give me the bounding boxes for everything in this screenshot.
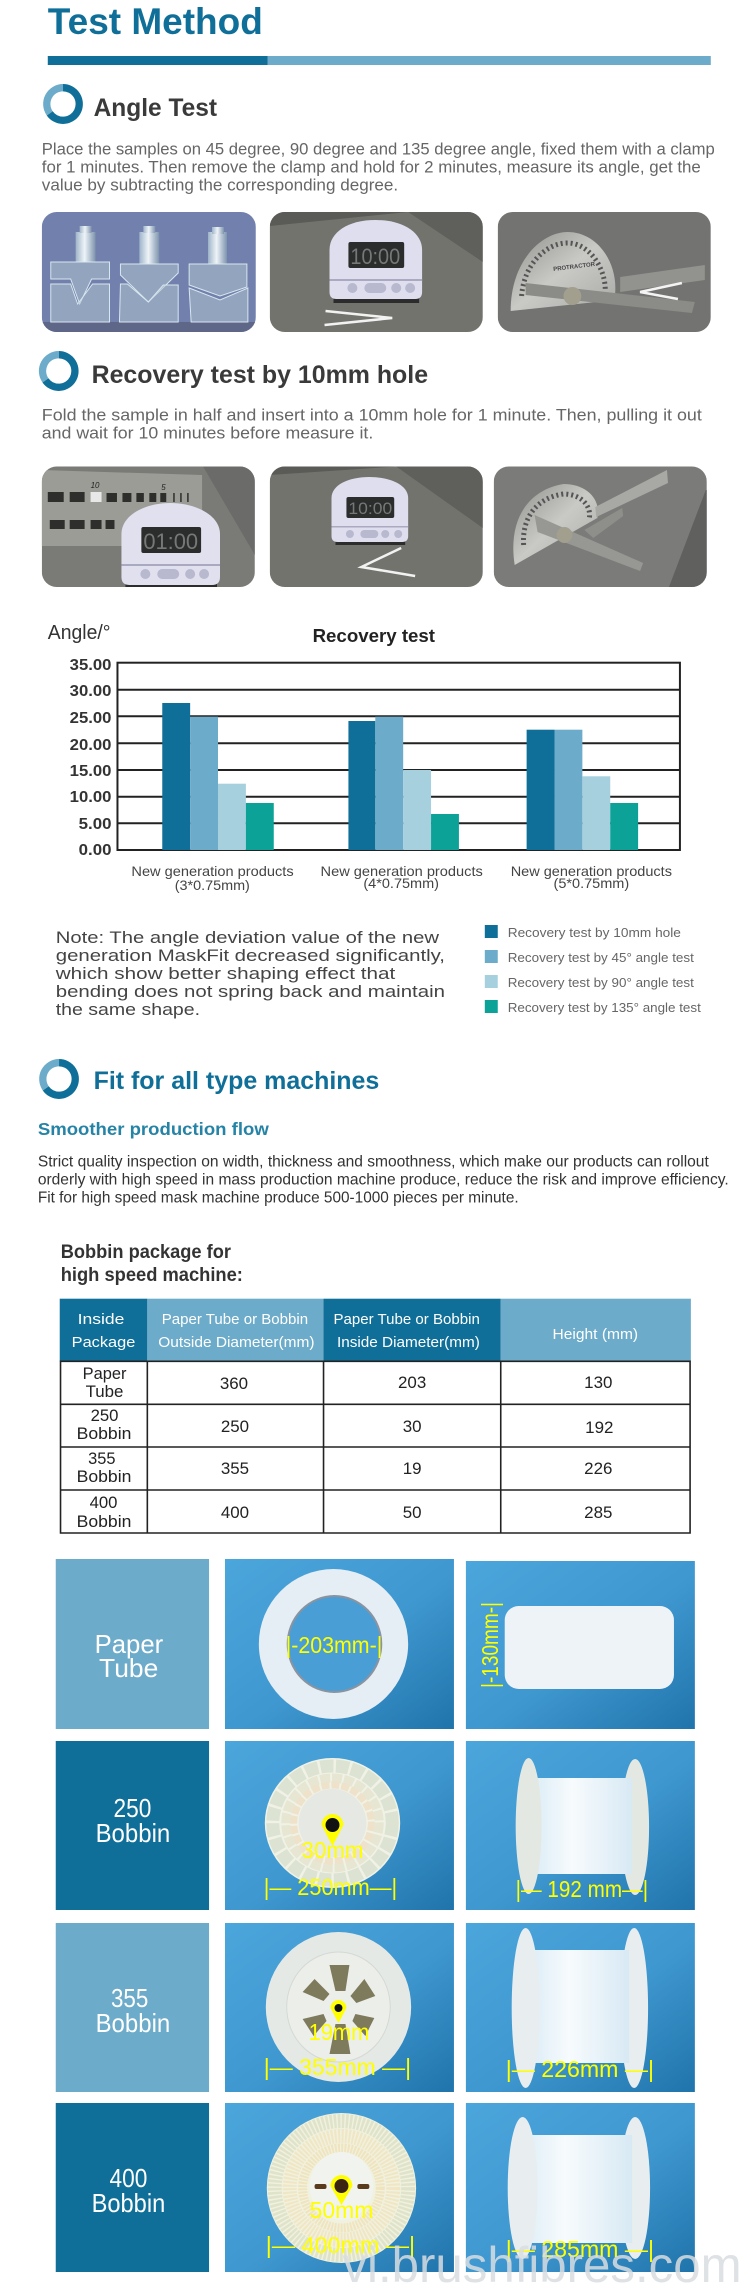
heading: angle test: Angle Test [94, 94, 217, 122]
text: angle test description: value by subtracting the corresponding degree. [42, 176, 398, 195]
table header: Outside Diameter(mm) [158, 1334, 315, 1351]
tile: 355 bobbin: Bobbin [96, 2010, 170, 2038]
note text: the same shape. [56, 1000, 200, 1019]
photo: 400 bobbin side: |— 285mm —| [506, 2236, 654, 2262]
text: machines description: orderly with high speed in mass production machine produce, reduce the risk and improve efficiency. [38, 1171, 729, 1189]
table row: 400 bobbin [77, 1494, 612, 1531]
icon: ring angle test [47, 88, 79, 120]
photo: timer with sample: 10:00 [350, 244, 400, 269]
table row: paper tube: 130 [584, 1373, 612, 1392]
text: angle test description: for 1 minutes. Then remove the clamp and hold for 2 minutes, measure its angle, get the [42, 158, 701, 177]
text: machines description [38, 1153, 729, 1207]
tile: 400 bobbin: Bobbin [92, 2190, 165, 2218]
table row: 400 bobbin: 285 [584, 1503, 612, 1522]
photo: protractor measuring [494, 466, 707, 587]
text: recovery test description: and wait for 10 minutes before measure it. [42, 424, 373, 443]
chart x axis labels: New generation products [511, 864, 672, 879]
table row: paper tube: 360 [220, 1374, 248, 1393]
chart y axis labels: 10.00 [70, 789, 111, 806]
table row: 355 bobbin: 226 [584, 1459, 612, 1478]
table row: 355 bobbin: 355 [221, 1459, 249, 1478]
chart x axis labels: New generation products [321, 864, 483, 879]
icon: ring machines [43, 1063, 75, 1095]
tile: 250 bobbin: 250 [113, 1795, 151, 1823]
chart y axis labels: 20.00 [70, 737, 111, 754]
table: bobbin package [60, 1299, 691, 1533]
note text: bending does not spring back and maintain [56, 982, 445, 1001]
photo: 250 bobbin front [225, 1741, 454, 1910]
table heading: high speed machine: [61, 1265, 243, 1286]
table row: 250 bobbin: 250 [221, 1417, 249, 1436]
bars group 5x0.75 [527, 730, 638, 850]
table header: Paper Tube or Bobbin [162, 1311, 308, 1328]
photo: protractor with sample: PROTRACTOR [553, 262, 596, 273]
table row: 250 bobbin: Bobbin [77, 1425, 131, 1443]
tile: 250 bobbin: Bobbin [96, 1820, 170, 1848]
tile: 250 bobbin [56, 1741, 209, 1910]
legend: Recovery test by 90° angle test [508, 975, 694, 990]
watermark: vi.brushfibres.com [342, 2237, 742, 2292]
chart y axis labels: 35.00 [70, 657, 111, 674]
chart y axis labels: 25.00 [70, 710, 111, 727]
table row: 400 bobbin: Bobbin [77, 1513, 131, 1531]
tile: paper tube: Paper [95, 1631, 164, 1659]
photo: 250 bobbin side: |— 192 mm—| [516, 1876, 648, 1902]
photo: 355 bobbin front [225, 1923, 454, 2092]
bars group 3x0.75 [162, 703, 274, 850]
legend: Recovery test by 10mm hole [508, 925, 681, 940]
chart axis unit: Angle/° [48, 622, 111, 644]
table row: 250 bobbin: 250 [91, 1407, 118, 1425]
subheading: Smoother production flow [38, 1119, 269, 1139]
photo: 250 bobbin side [466, 1741, 695, 1910]
tile: 355 bobbin [56, 1923, 209, 2092]
photo: paper tube side: |-130mm-| [477, 1602, 503, 1688]
table heading: Bobbin package for [61, 1242, 232, 1263]
table row: 400 bobbin: 50 [403, 1503, 422, 1522]
table header: Paper Tube or Bobbin [333, 1311, 480, 1328]
photo: 400 bobbin front [225, 2103, 454, 2272]
heading: recovery test: Recovery test by 10mm hole [92, 361, 428, 389]
table row: paper tube [83, 1365, 612, 1401]
chart y axis labels: 5.00 [79, 816, 111, 833]
heading: fit for all type machines: Fit for all type machines [94, 1067, 379, 1095]
title: Test Method [48, 1, 263, 42]
note text [55, 928, 445, 1019]
bars group 4x0.75 [348, 717, 459, 850]
tile: paper tube [56, 1559, 209, 1729]
text: machines description: Fit for high speed mask machine produce 500-1000 pieces per minute. [38, 1189, 519, 1207]
photo: acrylic angle blocks [42, 212, 256, 332]
table row: 250 bobbin: 30 [403, 1417, 422, 1436]
chart plot frame and grid [117, 663, 680, 850]
text: angle test description [42, 140, 715, 195]
photo: timer and bent sample: 10:00 [348, 499, 392, 518]
photo: 250 bobbin front: 30mm [302, 1837, 363, 1863]
photo: timer and bent sample [270, 466, 483, 587]
photo: hole gauge and timer [42, 466, 255, 587]
tile: 355 bobbin: 355 [111, 1985, 148, 2013]
table row: 355 bobbin: Bobbin [77, 1468, 131, 1486]
text: recovery test description: Fold the sample in half and insert into a 10mm hole for 1 minute. Then, pulling it out [42, 406, 702, 425]
photo: paper tube front: |-203mm-| [286, 1632, 382, 1658]
tile: 400 bobbin [56, 2103, 209, 2272]
chart title: Recovery test [313, 625, 435, 646]
note text: generation MaskFit decreased significantly, [56, 946, 445, 965]
tile: paper tube: Tube [99, 1655, 158, 1683]
chart x axis labels: (4*0.75mm) [363, 876, 439, 891]
photo: 400 bobbin side [466, 2103, 695, 2272]
tile: 400 bobbin: 400 [110, 2165, 147, 2193]
photo: 355 bobbin front: 19mm [309, 2019, 369, 2045]
title rule bar [48, 56, 711, 65]
table header: Inside [78, 1311, 124, 1328]
table row: 355 bobbin: 19 [403, 1459, 422, 1478]
photo: hole gauge and timer: 5 [161, 483, 166, 492]
chart y axis labels: 30.00 [70, 683, 111, 700]
legend: Recovery test by 135° angle test [508, 1000, 701, 1015]
photo: 250 bobbin front: |— 250mm—| [264, 1874, 397, 1900]
table header: Package [72, 1334, 135, 1351]
table header: Inside Diameter(mm) [337, 1334, 480, 1351]
table header: Height (mm) [553, 1326, 638, 1343]
photo: timer with sample [270, 212, 483, 332]
table row: 355 bobbin [77, 1450, 612, 1486]
table row: paper tube: Tube [86, 1383, 123, 1401]
table row: 400 bobbin: 400 [90, 1494, 117, 1512]
table header [60, 1299, 691, 1361]
legend: Recovery test by 45° angle test [508, 950, 694, 965]
chart x axis labels [131, 864, 672, 893]
photo: protractor with sample [498, 212, 711, 332]
table row: 250 bobbin: 192 [585, 1418, 613, 1437]
photo: 355 bobbin front: |— 355mm —| [264, 2054, 411, 2080]
photo: 355 bobbin side [466, 1923, 695, 2092]
note text: which show better shaping effect that [55, 964, 396, 983]
chart y axis labels: 0.00 [79, 842, 111, 859]
table row: paper tube: 203 [398, 1373, 426, 1392]
text: recovery test description [42, 406, 702, 443]
icon: ring recovery test [43, 355, 75, 387]
text: machines description: Strict quality inspection on width, thickness and smoothness, which make our products can rollout [38, 1153, 709, 1171]
chart: recovery test bars [48, 622, 680, 893]
photo: hole gauge and timer: 10 [91, 481, 100, 490]
table row: paper tube: Paper [83, 1365, 127, 1383]
photo: 400 bobbin front: |— 400mm —| [266, 2232, 415, 2258]
photo: hole gauge and timer: 01:00 [143, 529, 198, 554]
table grid [60, 1361, 691, 1533]
chart y axis labels [70, 657, 111, 859]
photo: paper tube side [466, 1561, 695, 1729]
photo: 355 bobbin side: |— 226mm —| [506, 2056, 654, 2082]
chart x axis labels: (3*0.75mm) [175, 878, 250, 893]
table heading [61, 1242, 243, 1286]
note text: Note: The angle deviation value of the new [56, 928, 440, 947]
table row: 250 bobbin [77, 1407, 613, 1443]
photo: paper tube front [225, 1559, 454, 1729]
table row: 400 bobbin: 400 [221, 1503, 249, 1522]
text: angle test description: Place the samples on 45 degree, 90 degree and 135 degree angle, fixed them with a clamp [42, 140, 715, 159]
chart x axis labels: New generation products [131, 864, 294, 879]
legend [485, 925, 701, 1015]
chart x axis labels: (5*0.75mm) [553, 876, 629, 891]
table row: 355 bobbin: 355 [88, 1450, 115, 1468]
photo: 400 bobbin front: 50mm [310, 2197, 373, 2223]
chart y axis labels: 15.00 [70, 763, 111, 780]
